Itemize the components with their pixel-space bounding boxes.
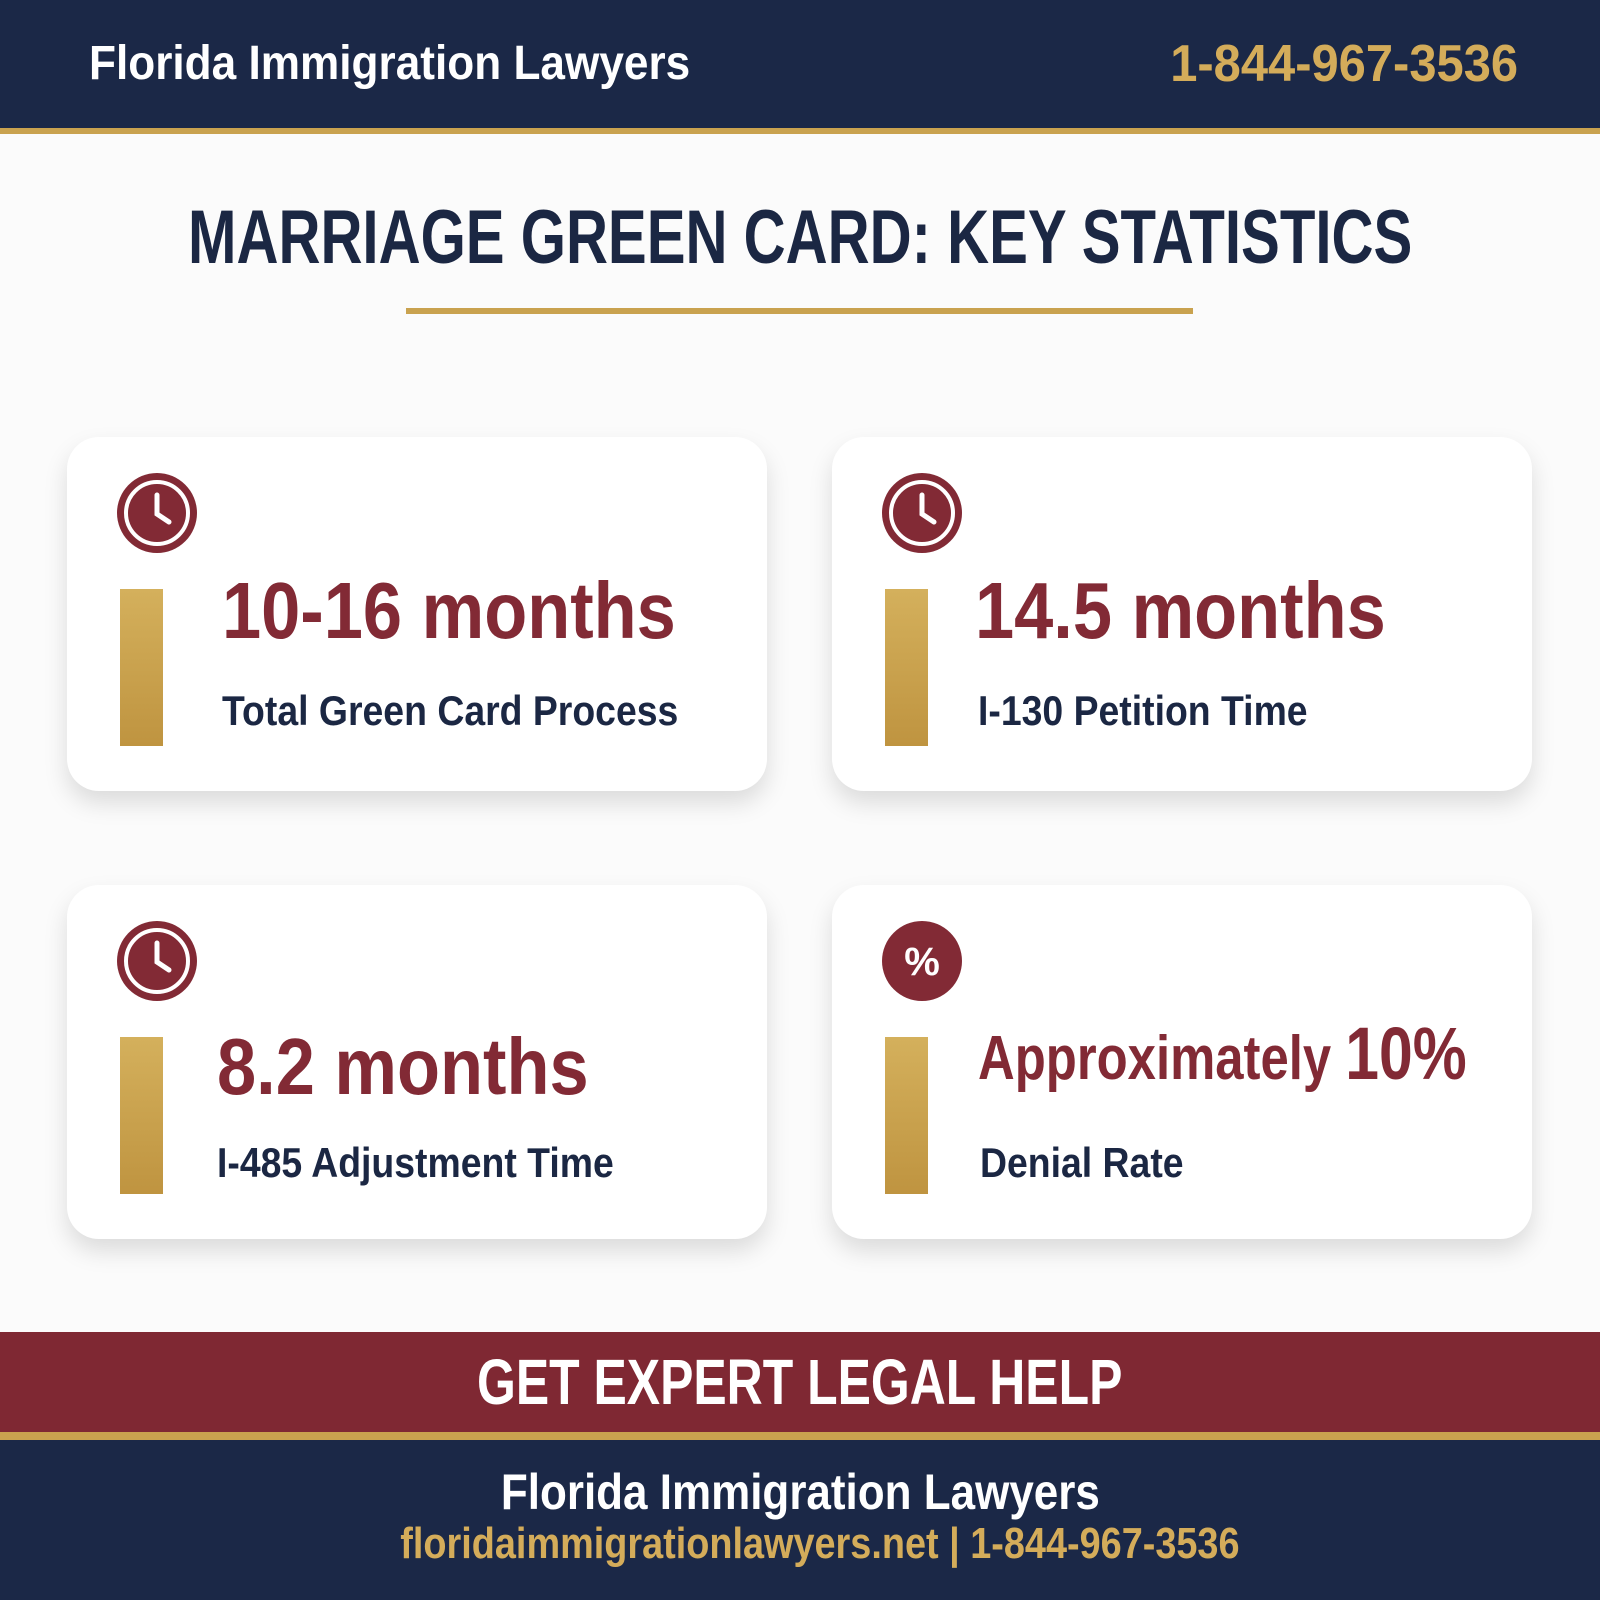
header bar: [0, 0, 1600, 134]
CTA banner: [0, 1332, 1600, 1432]
icon: percent: [882, 921, 962, 1001]
card: I-485: [67, 885, 767, 1239]
value: 14.5 months: [975, 566, 1386, 655]
footer: [0, 1432, 1600, 1600]
footer firm name: Florida Immigration Lawyers: [500, 1464, 1100, 1520]
card: denial rate: [832, 885, 1532, 1239]
CTA banner: GET EXPERT LEGAL HELP: [477, 1346, 1123, 1418]
header firm name: Florida Immigration Lawyers: [89, 37, 690, 90]
value: Approximately 10%: [978, 1012, 1467, 1095]
icon: clock: [117, 921, 197, 1001]
label: Denial Rate: [980, 1139, 1184, 1186]
title underline: [406, 308, 1193, 314]
label: Total Green Card Process: [222, 687, 678, 734]
header phone: 1-844-967-3536: [1170, 35, 1518, 93]
value: 8.2 months: [217, 1022, 589, 1111]
card: I-130: [832, 437, 1532, 791]
value: 10-16 months: [222, 566, 676, 655]
label: I-485 Adjustment Time: [217, 1139, 614, 1186]
icon: clock: [882, 473, 962, 553]
icon: clock: [117, 473, 197, 553]
card: total process: [67, 437, 767, 791]
icon: percent: %: [904, 940, 940, 984]
footer contact: floridaimmigrationlawyers.net | 1-844-967-3536: [400, 1519, 1240, 1568]
label: I-130 Petition Time: [978, 687, 1308, 734]
title: MARRIAGE GREEN CARD: KEY STATISTICS: [188, 195, 1412, 280]
